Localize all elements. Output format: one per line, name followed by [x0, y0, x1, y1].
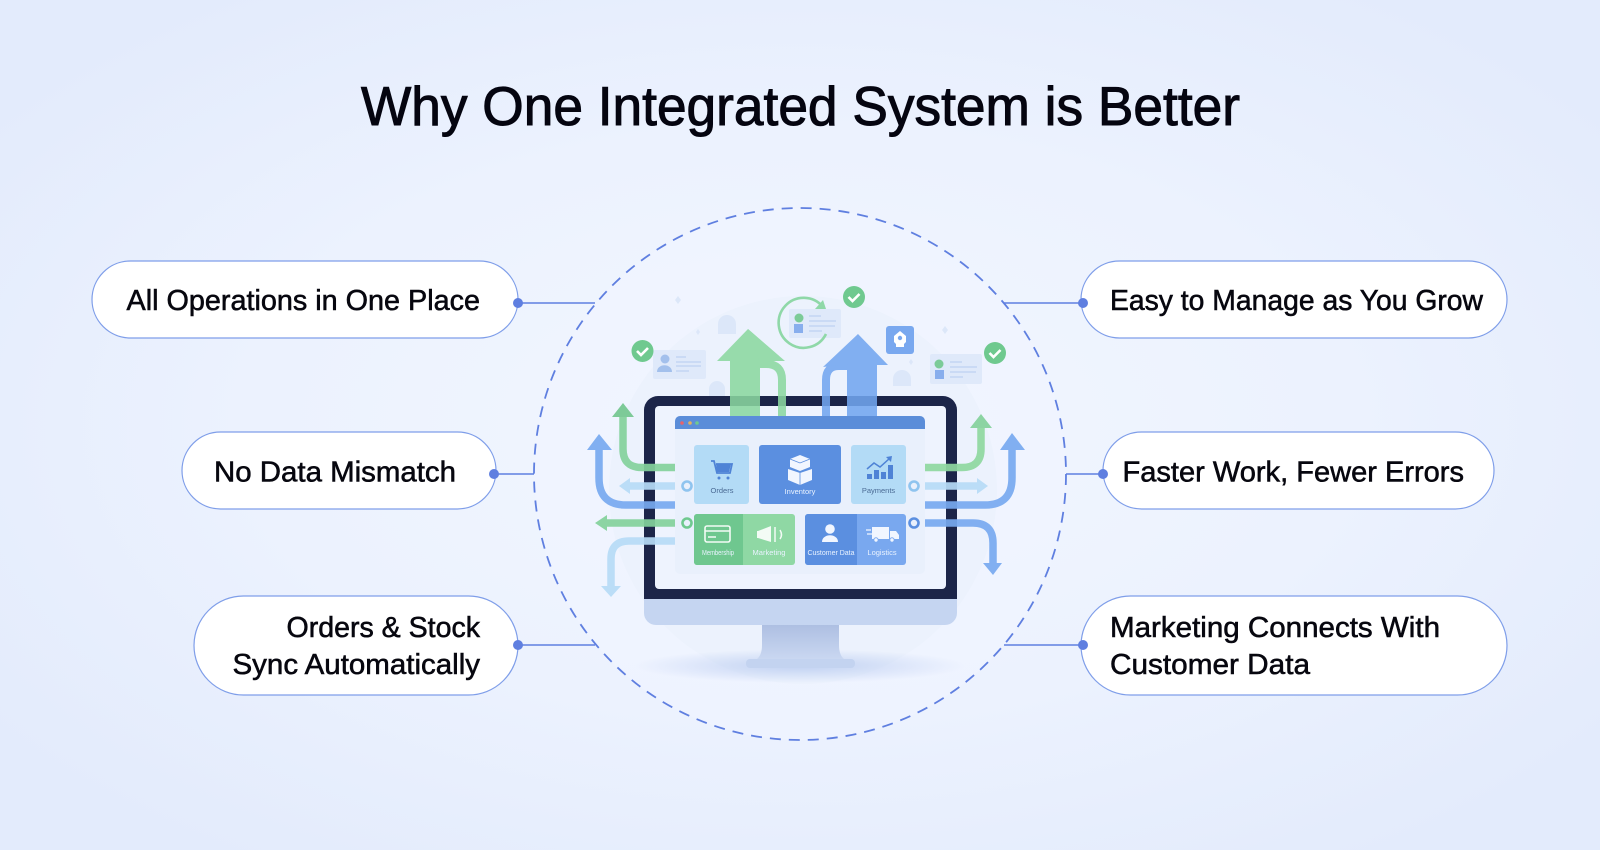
callout: marketing connects: Customer Data	[1110, 649, 1310, 681]
icon: check badge right	[984, 342, 1006, 364]
side arrows left	[587, 403, 684, 597]
card: user profile	[653, 350, 706, 379]
icon: sync ring	[779, 298, 826, 348]
arrow: green up right	[925, 414, 992, 468]
title: Why One Integrated System is Better	[361, 75, 1240, 137]
icon: blue security tile	[886, 326, 914, 354]
arrow: green left	[595, 515, 684, 531]
arrow: blue up right	[925, 433, 1025, 505]
callout: no data mismatch	[182, 432, 534, 509]
tile: customer data and logistics: Logistics	[867, 548, 897, 557]
tile: inventory	[759, 445, 841, 504]
monitor stand	[635, 625, 965, 683]
callout: faster work	[1066, 432, 1494, 509]
callout: faster work: Faster Work, Fewer Errors	[1122, 456, 1464, 488]
callout: no data mismatch: No Data Mismatch	[214, 456, 456, 488]
tile: membership and marketing	[694, 514, 795, 565]
callout: orders and stock	[194, 596, 595, 695]
callout: easy to manage: Easy to Manage as You Grow	[1110, 285, 1483, 317]
callout: all operations	[92, 261, 595, 338]
arrow: light blue down left	[601, 541, 676, 597]
side arrows right	[917, 414, 1025, 575]
background glow	[609, 296, 997, 684]
connection nodes	[682, 482, 918, 528]
monitor body	[644, 396, 957, 625]
tile: orders: Orders	[711, 486, 734, 495]
big green up arrow	[717, 329, 785, 416]
tile: payments: Payments	[862, 486, 895, 495]
callout: orders and stock: Sync Automatically	[232, 649, 481, 681]
card: sync checklist	[789, 309, 841, 338]
tile: inventory: Inventory	[785, 487, 816, 496]
arrow: green up left	[612, 403, 676, 468]
callout: marketing connects	[1004, 596, 1507, 695]
callout: orders and stock: Orders & Stock	[286, 612, 481, 644]
tile: customer data and logistics	[805, 514, 906, 565]
arrow: blue down right	[917, 523, 1002, 575]
card: checklist right	[930, 354, 982, 384]
arrow: light blue left	[619, 478, 684, 494]
big blue up arrow	[823, 334, 888, 416]
tile: orders	[694, 445, 749, 504]
tile: membership and marketing: Marketing	[753, 548, 785, 557]
app window	[675, 416, 925, 574]
arrow: blue up left	[587, 434, 676, 505]
dashed circle	[534, 208, 1066, 740]
illustration: integrated system monitor	[587, 286, 1025, 684]
callout: easy to manage	[1004, 261, 1507, 338]
callout: all operations: All Operations in One Place	[126, 285, 480, 317]
decorative ghost shapes	[675, 296, 948, 396]
tile: payments	[851, 445, 906, 504]
callout: marketing connects: Marketing Connects With	[1110, 612, 1440, 644]
arrow: light blue right	[917, 478, 988, 494]
icon: check badge left	[632, 340, 654, 362]
tile: membership and marketing: Membership	[702, 548, 734, 557]
icon: check badge top	[843, 286, 865, 308]
tile: customer data and logistics: Customer Data	[808, 548, 855, 557]
